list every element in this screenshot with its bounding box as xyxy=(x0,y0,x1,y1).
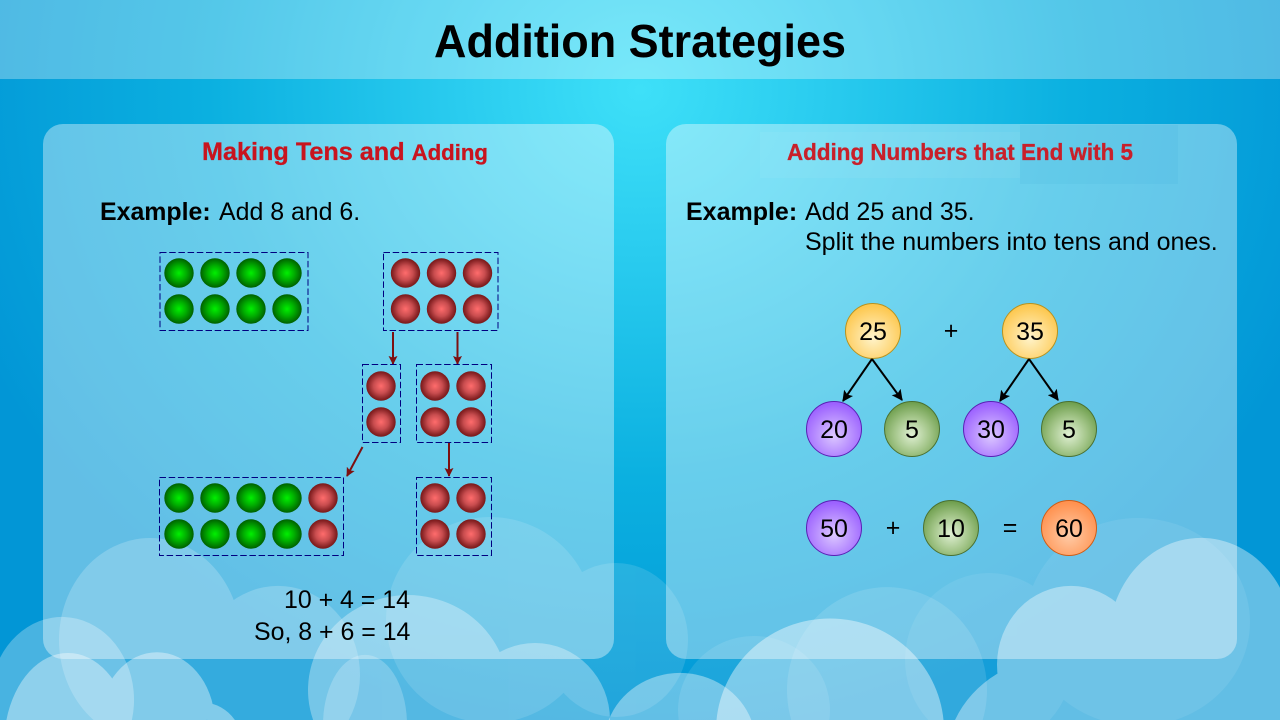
node: 30 xyxy=(964,402,1018,456)
arrows: 25 split xyxy=(843,359,902,401)
group: ten counters xyxy=(160,478,344,556)
node: 60 xyxy=(1042,500,1096,556)
group: remaining four counters xyxy=(416,478,492,556)
node: 10 xyxy=(924,500,978,556)
example text: add 25 and 35: Example: xyxy=(686,198,797,226)
arrow: split to four xyxy=(456,332,458,364)
heading patch xyxy=(760,125,1178,184)
title: Addition Strategies xyxy=(434,15,846,67)
content: making tens xyxy=(100,138,498,646)
example text: add 8 and 6: Example: xyxy=(100,198,211,226)
node: 50 xyxy=(806,500,862,556)
plus sign: + xyxy=(886,514,900,542)
arrow: two to ten xyxy=(347,447,362,476)
panel: making tens xyxy=(43,124,614,659)
node: 30: 30 xyxy=(977,416,1005,444)
node: 35: 35 xyxy=(1016,318,1044,346)
node: 5: 5 xyxy=(905,416,919,444)
equals sign: = xyxy=(1003,514,1017,542)
panel: numbers ending with 5 xyxy=(666,124,1237,659)
foreground clouds xyxy=(0,538,1280,720)
background clouds xyxy=(59,517,1250,720)
node: 10: 10 xyxy=(937,515,965,543)
example text: add 8 and 6: Add 8 and 6. xyxy=(219,198,360,226)
example text: add 25 and 35: Add 25 and 35. xyxy=(805,198,975,226)
node: 50: 50 xyxy=(820,515,848,543)
group: eight green counters xyxy=(160,252,308,330)
result text: So, 8 + 6 = 14 xyxy=(254,618,411,646)
group: two red counters xyxy=(362,364,400,442)
content: numbers ending with 5 xyxy=(686,125,1218,556)
group: six red counters xyxy=(384,252,498,330)
node: 5 xyxy=(884,402,940,456)
arrows: 35 split xyxy=(1000,359,1058,401)
node: 20 xyxy=(806,402,862,456)
arrow: split to two xyxy=(392,332,394,364)
heading: numbers ending with 5: Adding Numbers that End with 5 xyxy=(787,139,1133,165)
group: four red counters xyxy=(416,364,492,442)
plus sign: + xyxy=(944,317,958,345)
example text: add 25 and 35: Split the numbers into tens and ones. xyxy=(805,228,1218,256)
node: 5: 5 xyxy=(1062,416,1076,444)
node: 20: 20 xyxy=(820,416,848,444)
node: 5 xyxy=(1042,402,1096,456)
node: 60: 60 xyxy=(1055,515,1083,543)
node: 25: 25 xyxy=(859,318,887,346)
heading: making tens: Making Tens and Adding xyxy=(202,138,488,166)
result text: 10 + 4 = 14 xyxy=(284,586,410,614)
node: 25 xyxy=(846,304,900,358)
header band xyxy=(0,0,1280,79)
arrow: four down xyxy=(448,443,450,476)
node: 35 xyxy=(1002,304,1058,358)
